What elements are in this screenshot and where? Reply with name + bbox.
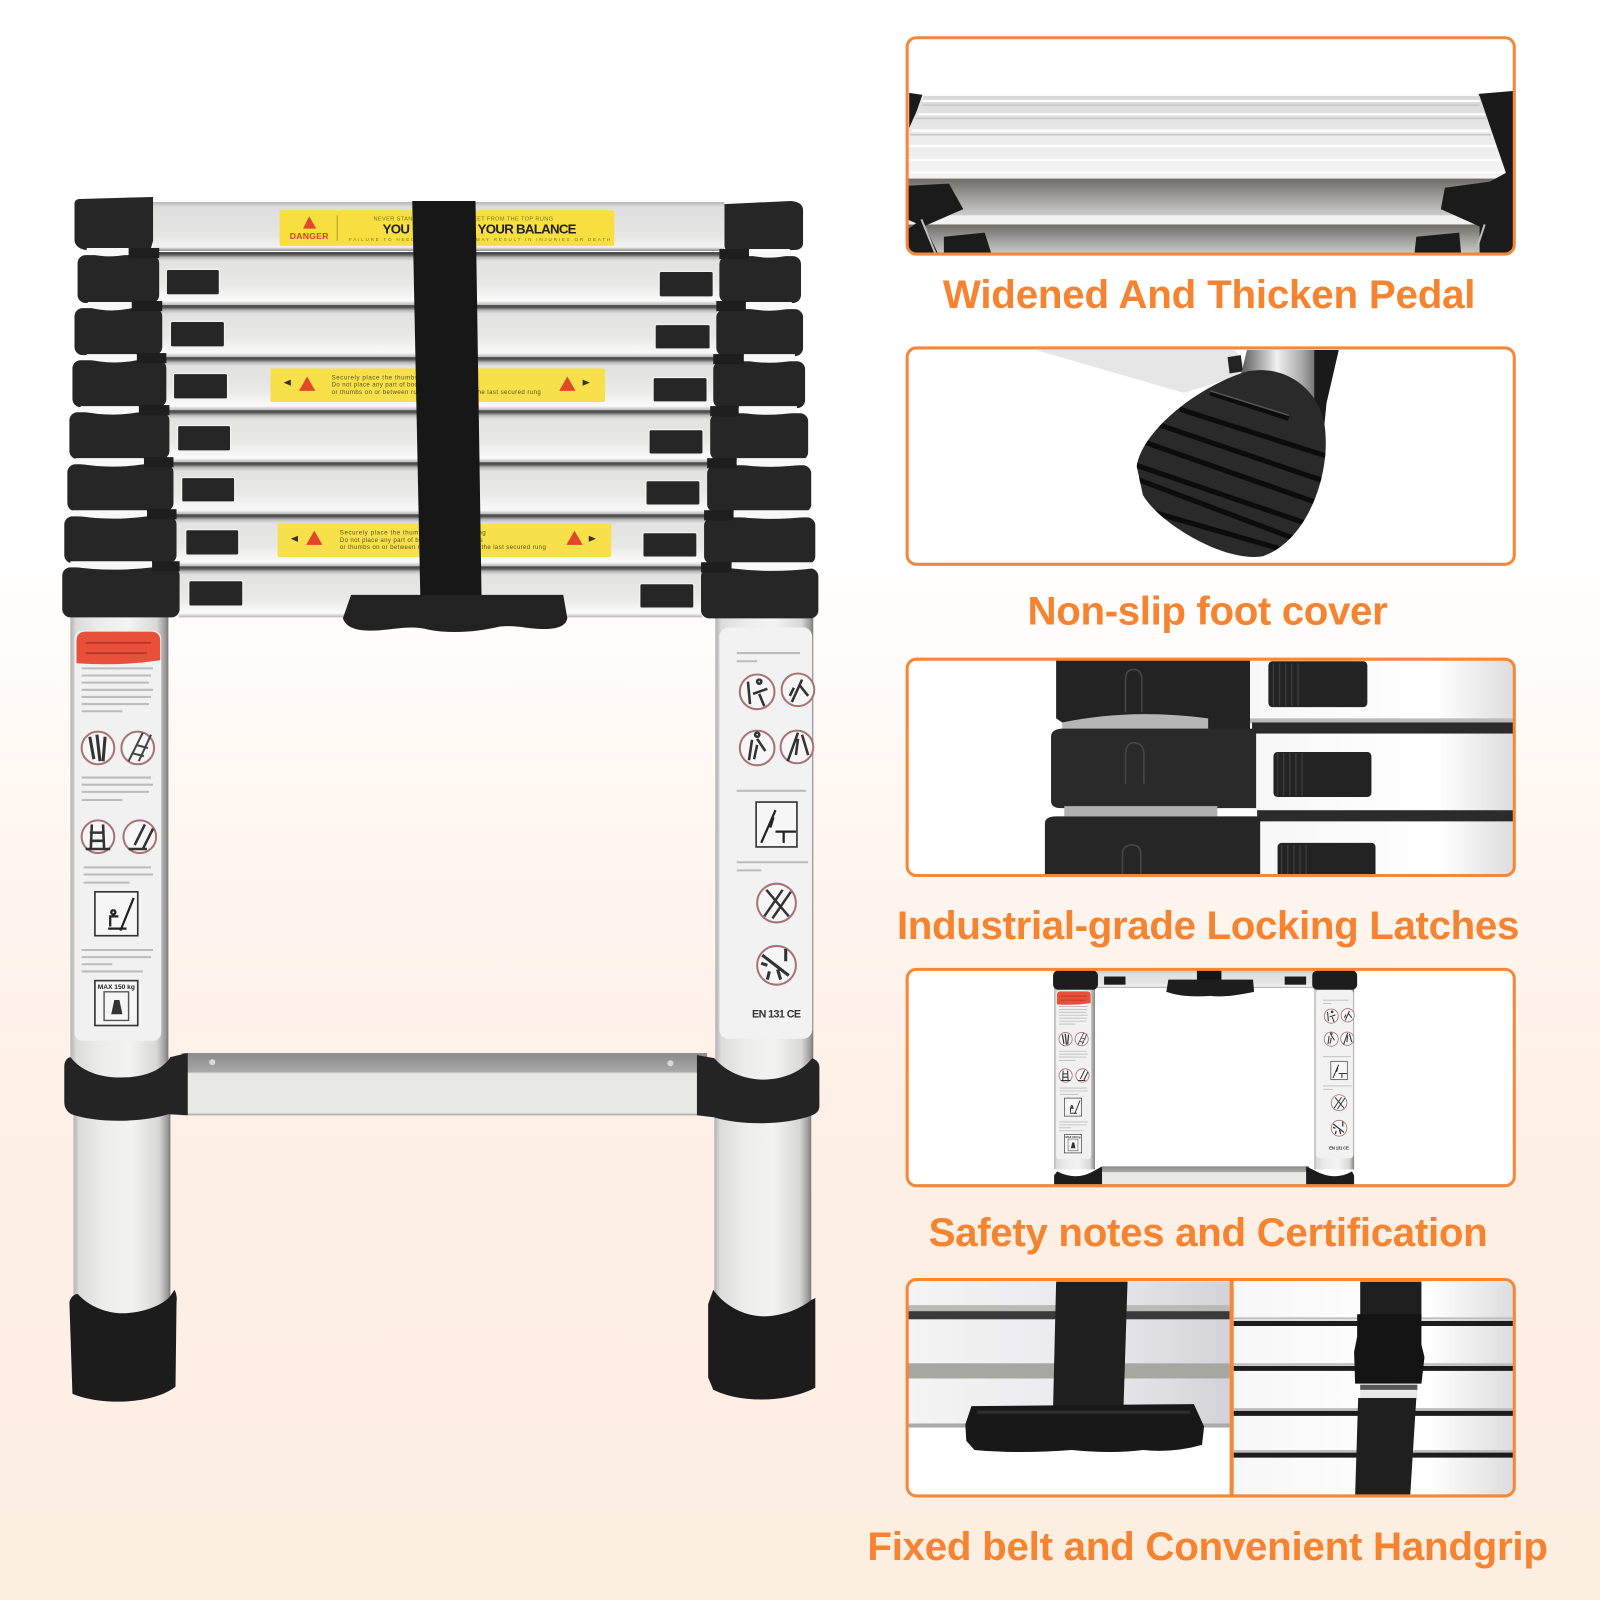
rung 1 with end caps — [74, 197, 803, 251]
caution label lower: Do not place any part of body, hands or fingers — [340, 537, 483, 544]
left black hinge blocks — [62, 255, 180, 617]
panel: belt and handgrip — [907, 1280, 1514, 1496]
handgrip photo — [907, 1282, 1230, 1452]
caution label lower: Securely place the thumbs around each rung — [340, 530, 486, 537]
right black hinge blocks — [701, 256, 818, 618]
danger label: FAILURE TO HEED THIS CAUTION MAY RESULT IN INJURIES OR DEATH — [349, 237, 610, 242]
panel: foot cover — [907, 348, 1514, 564]
danger label — [280, 210, 614, 246]
caption: foot cover: Non-slip foot cover — [1028, 588, 1388, 633]
silver rings between sections — [70, 248, 813, 571]
buckle strap photo — [1234, 1282, 1514, 1496]
left safety sticker: MAX 150 kg — [98, 984, 135, 991]
pedal photo — [907, 91, 1514, 255]
right lower tube — [714, 1107, 811, 1316]
middle rung right bracket — [697, 1055, 819, 1123]
connectors between hinge blocks — [129, 248, 749, 572]
middle rung left bracket — [64, 1053, 188, 1121]
photo divider — [1230, 1280, 1234, 1496]
right safety sticker — [719, 628, 814, 1039]
left safety sticker — [74, 631, 161, 1041]
lock latches left — [166, 269, 243, 606]
panel: locking latches — [907, 659, 1516, 878]
main ladder illustration — [62, 197, 819, 1402]
panel: safety notes — [907, 969, 1514, 1187]
caption: pedal: Widened And Thicken Pedal — [943, 272, 1476, 317]
handgrip — [343, 595, 567, 632]
panel: widened pedal — [907, 38, 1514, 255]
danger label: YOU CAN LOSE YOUR BALANCE — [383, 222, 577, 237]
left foot — [69, 1290, 177, 1402]
left upper tube — [70, 612, 168, 1084]
fixing strap — [412, 201, 482, 602]
left lower tube — [73, 1107, 170, 1316]
latch photo — [1045, 659, 1516, 878]
lock latches right — [640, 271, 713, 608]
caution label upper: or thumbs on or between rungs when opening the last secured rung — [332, 389, 541, 396]
caption: belt: Fixed belt and Convenient Handgrip — [867, 1524, 1548, 1569]
foot photo — [1036, 350, 1339, 557]
right upper tube — [715, 612, 813, 1084]
miniature ladder — [1053, 970, 1357, 1187]
caption: latches: Industrial-grade Locking Latches — [897, 903, 1519, 948]
caution label upper: Do not place any part of body, hands or fingers — [332, 382, 474, 389]
caution label upper — [270, 368, 605, 402]
caption: safety: Safety notes and Certification — [929, 1210, 1488, 1255]
right foot — [708, 1290, 815, 1400]
right safety sticker: EN 131 CE — [752, 1008, 801, 1020]
caution label lower — [278, 523, 611, 557]
caution label lower: or thumbs on or between rungs when opening the last secured rung — [340, 544, 546, 551]
caution label upper: Securely place the thumbs around each rung — [332, 375, 478, 382]
danger label: NEVER STAND HIGHER THAN 3 FEET FROM THE TOP RUNG — [373, 216, 553, 222]
danger label: DANGER — [290, 231, 329, 241]
rungs 2 to 8 — [158, 252, 720, 617]
middle rung — [182, 1053, 707, 1115]
